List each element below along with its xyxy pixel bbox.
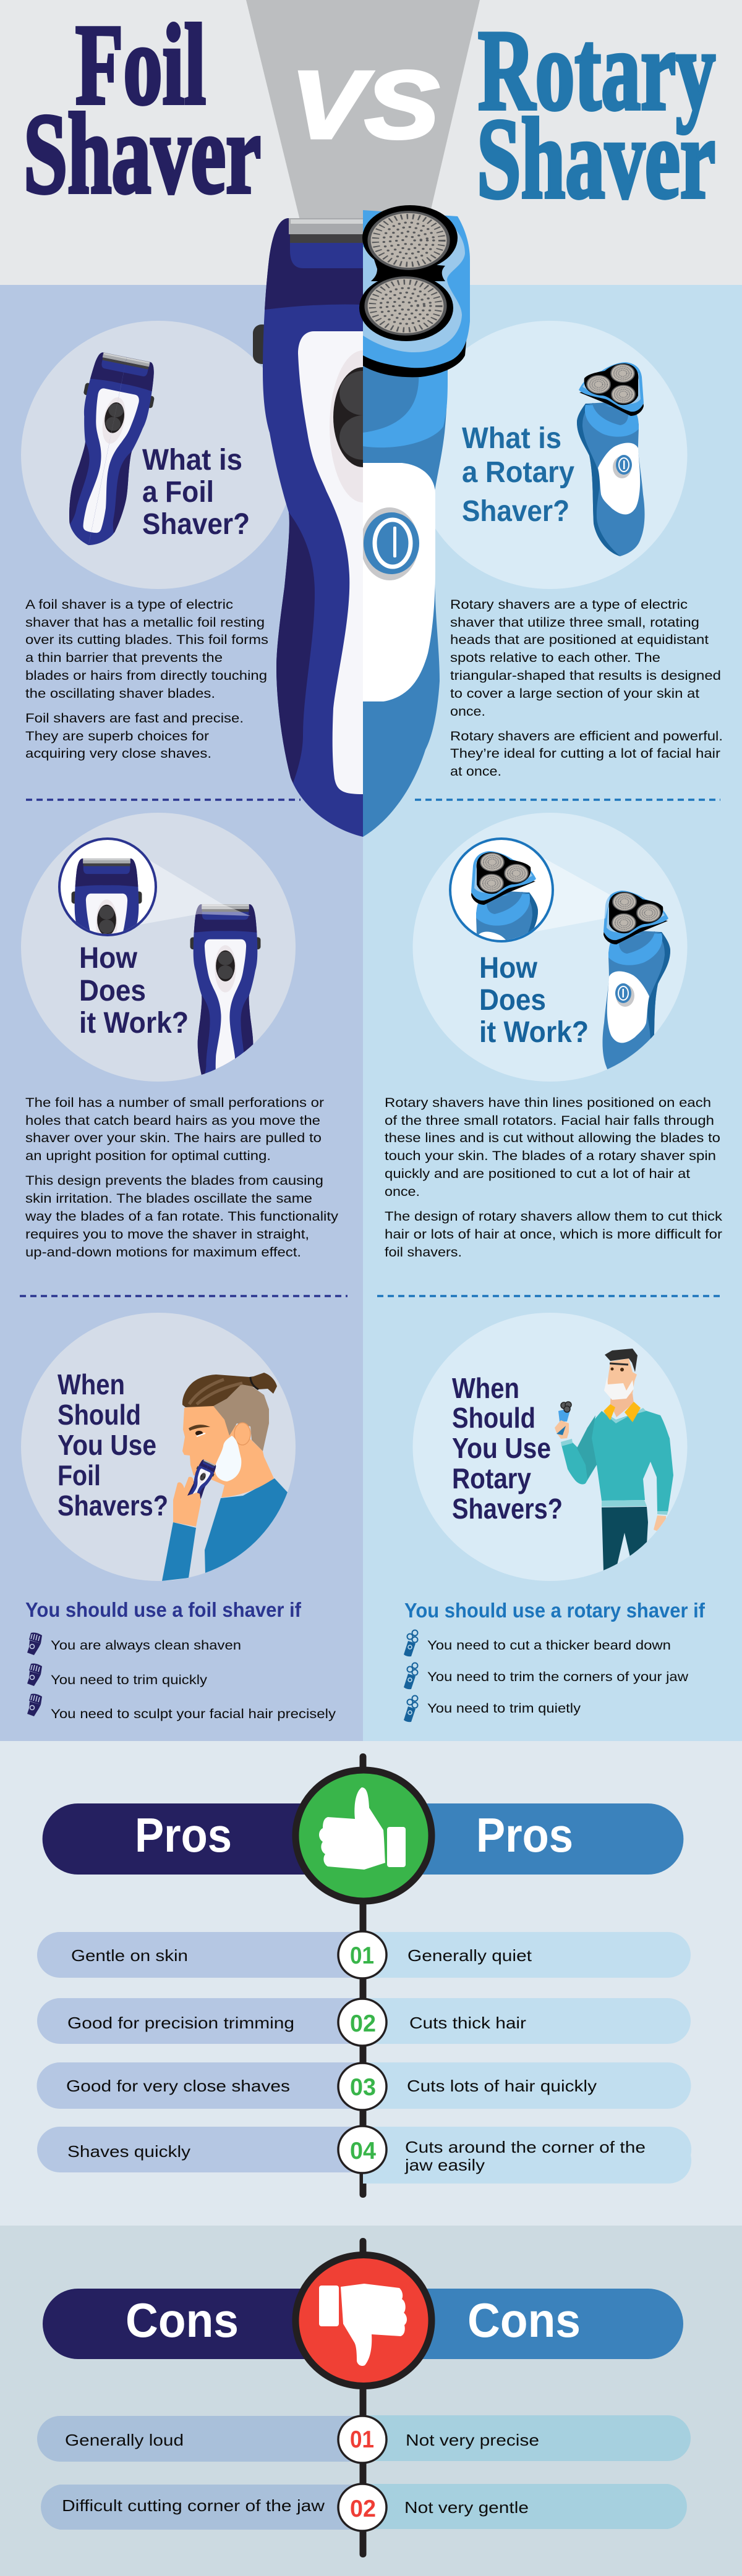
divider right 1 [415, 799, 720, 801]
panel: pros background [0, 1741, 742, 2226]
item 1 [404, 1630, 671, 1656]
pros row 4: Cuts around the corner of the [405, 2138, 646, 2156]
rotary half of large shaver [359, 205, 470, 837]
heading: When should you use rotary shavers: You Use [452, 1432, 551, 1464]
text: how rotary works: foil shavers. [385, 1245, 462, 1260]
text: how foil works: an upright position for optimal cutting. [25, 1148, 271, 1163]
cuffs [561, 1439, 668, 1515]
panel: foil background [0, 285, 363, 1741]
magnifier cone [123, 858, 250, 928]
text: how foil works: holes that catch beard hairs as you move the [25, 1113, 320, 1128]
cons row 2 [41, 2484, 687, 2530]
text: foil description: Foil shavers are fast and precise. [25, 711, 244, 726]
item 2 [404, 1663, 689, 1689]
title: VS: VS [291, 51, 439, 158]
text: rotary description: Rotary shavers are efficient and powerful. [450, 729, 723, 744]
section 1 circle: rotary [413, 321, 688, 589]
beard [604, 1376, 634, 1400]
pros banner left [43, 1803, 371, 1875]
pros banner right [359, 1803, 683, 1875]
subheading: rotary shaver if: You should use a rotary shaver if [404, 1599, 706, 1622]
pros row 4 [37, 2127, 691, 2184]
heading: When should you use rotary shavers: Should [452, 1402, 535, 1434]
heading: How Does it Work foil [79, 942, 189, 1040]
cons banner right [359, 2289, 683, 2359]
hair and bun [182, 1373, 277, 1407]
neck [610, 1394, 634, 1417]
sweater arm shading [577, 1415, 597, 1479]
item 3 [404, 1696, 581, 1722]
divider right 2 [377, 1295, 722, 1297]
section 3 circle: foil [21, 1313, 296, 1581]
section 1 circle: foil [21, 321, 296, 589]
item 2: You need to trim quickly [51, 1672, 207, 1687]
eyebrow and eye [189, 1425, 210, 1436]
pros row 1: Gentle on skin [71, 1946, 188, 1965]
pros number 01: 01 [350, 1943, 374, 1969]
panel: rotary background [363, 285, 742, 1741]
text: rotary description: triangular-shaped that results is designed [450, 668, 721, 683]
foil half of large shaver [247, 210, 396, 837]
title: Foil Shaver [23, 1, 261, 218]
hands [654, 1515, 666, 1531]
heading: How Does it Work rotary: How [479, 952, 538, 985]
text: rotary description: shaver that utilize three small, rotating [450, 615, 699, 630]
text: foil description: shaver that has a metallic foil resting [25, 615, 265, 630]
pros row 2: Good for precision trimming [67, 2014, 294, 2032]
waistband [602, 1500, 647, 1507]
cons banner right: Cons [467, 2293, 581, 2347]
heading: When should you use foil shavers: Should [58, 1399, 141, 1431]
text: how foil works [25, 1095, 338, 1260]
magnifier inset [58, 837, 157, 936]
item 1: You are always clean shaven [51, 1638, 241, 1653]
heading: How Does it Work rotary: it Work? [479, 1016, 589, 1049]
subheading: foil shaver if: You should use a foil shaver if [25, 1598, 302, 1621]
heading: What is a Foil Shaver: What is [142, 444, 242, 477]
item 3: You need to trim quietly [427, 1701, 581, 1716]
sleeve [162, 1522, 196, 1581]
heading: What is a Rotary Shaver: What is [462, 422, 561, 455]
text: foil description: They are superb choices for [25, 729, 209, 744]
shaved side of hair [213, 1384, 269, 1451]
rotary shaver [602, 891, 670, 1085]
pros number 03 [338, 2063, 386, 2110]
heading: When should you use foil shavers: When [58, 1368, 125, 1400]
trousers [602, 1507, 648, 1571]
heading: When should you use rotary shavers: Shavers? [452, 1493, 563, 1525]
text: foil description: acquiring very close shaves. [25, 746, 211, 761]
text: foil description: over its cutting blades. This foil forms [25, 632, 268, 647]
hair streaks [189, 1379, 242, 1404]
text: foil description: A foil shaver is a type of electric [25, 597, 233, 612]
text: how rotary works [385, 1095, 722, 1260]
hand [173, 1477, 201, 1527]
text: how rotary works: these lines and is cut without allowing the blades to [385, 1130, 720, 1145]
ear [234, 1423, 250, 1445]
divider left 1 [26, 799, 301, 801]
text: foil description: the oscillating shaver blades. [25, 686, 215, 701]
neckband [602, 1408, 646, 1423]
section 3 circle: rotary [413, 1313, 688, 1581]
divider left 2 [20, 1295, 348, 1297]
heading: When should you use rotary shavers [452, 1372, 563, 1525]
cons row 2: Difficult cutting corner of the jaw [62, 2496, 325, 2515]
icon: thumbs down [296, 2255, 432, 2386]
text: rotary description: heads that are positioned at equidistant [450, 632, 709, 647]
section 2 circle: rotary [413, 813, 688, 1082]
item 3: You need to sculpt your facial hair precisely [51, 1706, 336, 1721]
pros row 3: Cuts lots of hair quickly [407, 2077, 597, 2095]
icon: foil shaver small [52, 347, 163, 553]
heading: What is a Foil Shaver: a Foil [142, 476, 214, 509]
text: how rotary works: Rotary shavers have thin lines positioned on each [385, 1095, 711, 1110]
heading: How Does it Work rotary [479, 952, 589, 1049]
heading: When should you use rotary shavers: Rotary [452, 1462, 531, 1494]
cons row 1: Generally loud [65, 2431, 184, 2449]
pros number 04: 04 [350, 2138, 376, 2164]
text: how foil works: skin irritation. The blades oscillate the same [25, 1191, 312, 1206]
cons number 02 [338, 2484, 386, 2531]
text: foil description [25, 597, 268, 761]
tiny rotary shaver [555, 1402, 571, 1439]
list: foil shaver reasons [27, 1633, 336, 1721]
pros row 4: Shaves quickly [67, 2142, 190, 2161]
heading: What is a Foil Shaver: Shaver? [142, 508, 250, 541]
text: how rotary works: quickly and are positioned to cut a lot of hair at [385, 1166, 690, 1181]
title: Foil Shaver: Foil [75, 1, 206, 129]
pros number 03: 03 [350, 2074, 376, 2101]
small foil shaver [187, 1460, 216, 1499]
text: how foil works: way the blades of a fan rotate. This functionality [25, 1209, 338, 1224]
pros number 04 [338, 2126, 386, 2173]
title: Foil Shaver: Shaver [23, 90, 261, 218]
icon: rotary shaver with magnifier [450, 839, 670, 1085]
neck and face [182, 1403, 274, 1498]
text: rotary description: to cover a large section of your skin at [450, 686, 699, 701]
heading: What is a Foil Shaver [142, 444, 250, 541]
text: how rotary works: of the three small rotators. Facial hair falls through [385, 1113, 714, 1128]
pros row 2 [37, 1998, 691, 2044]
pros number 02: 02 [350, 2010, 376, 2037]
illustration: man with rotary shaver [555, 1349, 673, 1571]
sweater [561, 1410, 673, 1512]
item 1: You need to cut a thicker beard down [427, 1638, 671, 1653]
heading: How Does it Work foil: Does [79, 975, 146, 1007]
eyes and brows [610, 1363, 628, 1371]
title: Rotary Shaver [477, 7, 715, 222]
text: rotary description: once. [450, 704, 485, 719]
pros row 1: Generally quiet [407, 1946, 532, 1965]
pros number 01 [338, 1931, 386, 1978]
title beam [246, 0, 480, 222]
text: how foil works: up-and-down motions for maximum effect. [25, 1245, 301, 1260]
text: how foil works: The foil has a number of small perforations or [25, 1095, 324, 1110]
heading: How Does it Work rotary: Does [479, 984, 546, 1017]
cons banner left [43, 2289, 371, 2359]
heading: How Does it Work foil: it Work? [79, 1007, 189, 1040]
item 3 [27, 1693, 336, 1721]
text: rotary description: at once. [450, 764, 501, 779]
foil shaver [190, 904, 261, 1075]
pros row 4: jaw easily [404, 2156, 485, 2174]
cons number 01: 01 [350, 2426, 374, 2453]
text: rotary description: Rotary shavers are a type of electric [450, 597, 688, 612]
text: rotary description: spots relative to each other. The [450, 650, 660, 665]
text: how rotary works: hair or lots of hair at once, which is more difficult for [385, 1227, 722, 1242]
pros banner left: Pros [135, 1808, 232, 1862]
text: rotary description: They’re ideal for cutting a lot of facial hair [450, 746, 720, 761]
pros row 2: Cuts thick hair [409, 2014, 526, 2032]
text: foil description: blades or hairs from directly touching [25, 668, 267, 683]
text: how rotary works: once. [385, 1184, 420, 1199]
pros banner right: Pros [476, 1808, 573, 1862]
heading: When should you use rotary shavers: When [452, 1372, 519, 1404]
heading: When should you use foil shavers: Foil [58, 1459, 101, 1491]
pros number 02 [338, 1999, 386, 2046]
shaving foam [215, 1436, 241, 1481]
icon: thumbs up [296, 1770, 432, 1901]
heading: How Does it Work foil: How [79, 942, 138, 975]
magnifier cone [520, 854, 610, 934]
cons row 2: Not very gentle [404, 2498, 529, 2517]
text: how rotary works: The design of rotary shavers allow them to cut thick [385, 1209, 722, 1224]
cons row 1 [37, 2415, 691, 2462]
heading: What is a Rotary Shaver [462, 422, 574, 528]
text: how foil works: requires you to move the shaver in straight, [25, 1227, 309, 1242]
pros row 3: Good for very close shaves [66, 2077, 290, 2095]
cons row 1: Not very precise [406, 2431, 539, 2449]
item 1 [27, 1633, 241, 1655]
item 2: You need to trim the corners of your jaw [427, 1669, 689, 1684]
panel: cons background [0, 2226, 742, 2576]
pros row 1 [37, 1932, 691, 1978]
text: how foil works: This design prevents the blades from causing [25, 1173, 323, 1188]
magnifier inset [449, 837, 554, 943]
hair band [250, 1377, 258, 1389]
face and ear [607, 1358, 637, 1394]
text: foil description: a thin barrier that prevents the [25, 650, 223, 665]
heading: What is a Rotary Shaver: Shaver? [462, 495, 569, 528]
section 2 circle: foil [21, 813, 296, 1082]
heading: When should you use foil shavers: Shavers? [58, 1489, 168, 1522]
collar [603, 1402, 641, 1422]
text: how foil works: shaver over your skin. The hairs are pulled to [25, 1130, 322, 1145]
list: rotary shaver reasons [404, 1630, 689, 1722]
pros timeline line [360, 1753, 366, 2198]
text: how rotary works: touch your skin. The blades of a rotary shaver spin [385, 1148, 716, 1163]
icon: rotary shaver small [577, 362, 645, 556]
heading: When should you use foil shavers: You Use [58, 1429, 156, 1461]
text: rotary description [450, 597, 723, 779]
cons number 02: 02 [350, 2496, 376, 2522]
pros row 3 [37, 2062, 691, 2109]
cons banner left: Cons [126, 2293, 239, 2347]
cons number 01 [338, 2416, 386, 2463]
cons timeline line [360, 2238, 366, 2557]
icon: foil shaver with magnifier [59, 839, 262, 1096]
heading: What is a Rotary Shaver: a Rotary [462, 456, 574, 489]
torso [205, 1478, 288, 1573]
hair [605, 1349, 638, 1372]
page header background [0, 0, 742, 285]
illustration: man shaving with foil shaver [162, 1373, 288, 1581]
item 2 [27, 1664, 207, 1687]
icon: large split shaver [247, 205, 470, 837]
heading: When should you use foil shavers [58, 1368, 168, 1522]
